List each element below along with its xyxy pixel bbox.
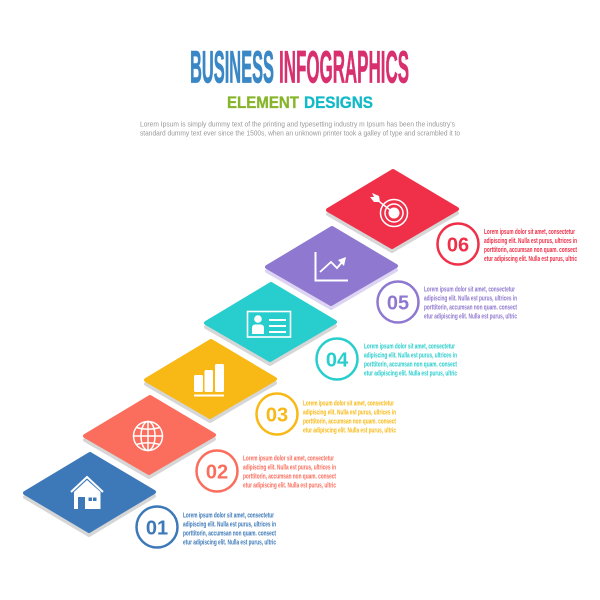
icon: target with arrow — [370, 193, 408, 226]
title: BUSINESS — [190, 42, 274, 92]
description 05 — [424, 284, 517, 320]
description 01: Lorem ipsum dolor sit amet, consectetur — [183, 510, 274, 520]
description 06 — [484, 227, 577, 263]
description 05: adipiscing elit. Nulla est purus, ultrices in — [424, 294, 517, 302]
description 01: adipiscing elit. Nulla est purus, ultrices in — [183, 520, 276, 528]
description 01: etur adipiscing elit. Nulla est purus, ultric — [183, 538, 276, 546]
description 05: Lorem ipsum dolor sit amet, consectetur — [424, 284, 515, 294]
description 03: Lorem ipsum dolor sit amet, consectetur — [303, 398, 394, 408]
description 03: etur adipiscing elit. Nulla est purus, ultric — [303, 426, 396, 434]
badge 01 — [136, 506, 178, 548]
description 03 — [303, 398, 396, 434]
description 03: adipiscing elit. Nulla est purus, ultrices in — [303, 408, 396, 416]
description 02: adipiscing elit. Nulla est purus, ultrices in — [243, 462, 336, 472]
description 04: porttitorin, accumsan non quam. consect — [364, 360, 457, 368]
description 04: Lorem ipsum dolor sit amet, consectetur — [364, 342, 455, 350]
description 02: porttitorin, accumsan non quam. consect — [243, 472, 336, 480]
icon: id card — [248, 312, 290, 337]
description 01 — [183, 510, 276, 546]
description 04 — [364, 342, 457, 378]
step 01 panel: blue — [25, 454, 154, 535]
intro text: standard dummy text ever since the 1500s, when an unknown printer took a galley of type and scrambled it to — [140, 128, 460, 138]
description 04: etur adipiscing elit. Nulla est purus, ultric — [364, 368, 457, 378]
intro text: Lorem Ipsum is simply dummy text of the printing and typesetting industry m Ipsum has been the industry's — [140, 120, 455, 128]
step 05 panel: purple — [267, 228, 396, 308]
description 03: porttitorin, accumsan non quam. consect — [303, 416, 396, 426]
step 06 panel: red — [328, 171, 457, 251]
badge 05 — [378, 282, 418, 322]
step 03 panel: yellow — [146, 341, 275, 421]
badge 04: 04 — [326, 350, 349, 372]
badge 06 — [438, 224, 478, 264]
intro text — [140, 120, 460, 138]
icon: line chart — [316, 252, 348, 280]
badge 03 — [256, 394, 298, 434]
badge 02: 02 — [206, 462, 228, 484]
step 04 panel: teal — [206, 284, 335, 364]
badge 02 — [196, 450, 238, 492]
subtitle — [227, 93, 373, 112]
badge 03: 03 — [266, 404, 288, 426]
description 05: porttitorin, accumsan non quam. consect — [424, 302, 517, 312]
subtitle: DESIGNS — [304, 93, 373, 112]
description 04: adipiscing elit. Nulla est purus, ultrices in — [364, 350, 457, 360]
badge 06: 06 — [447, 234, 469, 256]
description 05: etur adipiscing elit. Nulla est purus, ultric — [424, 312, 517, 320]
description 02 — [243, 454, 336, 490]
description 02: etur adipiscing elit. Nulla est purus, ultric — [243, 480, 336, 490]
step 02 panel: coral — [85, 397, 214, 477]
badge 01: 01 — [146, 518, 168, 540]
subtitle: ELEMENT — [227, 93, 300, 112]
icon: globe — [134, 422, 162, 450]
badge 04 — [316, 338, 358, 380]
description 01: porttitorin, accumsan non quam. consect — [183, 528, 276, 538]
icon: bar chart — [194, 364, 224, 396]
icon: house — [71, 477, 103, 509]
description 02: Lorem ipsum dolor sit amet, consectetur — [243, 454, 334, 462]
badge 05: 05 — [387, 292, 409, 314]
